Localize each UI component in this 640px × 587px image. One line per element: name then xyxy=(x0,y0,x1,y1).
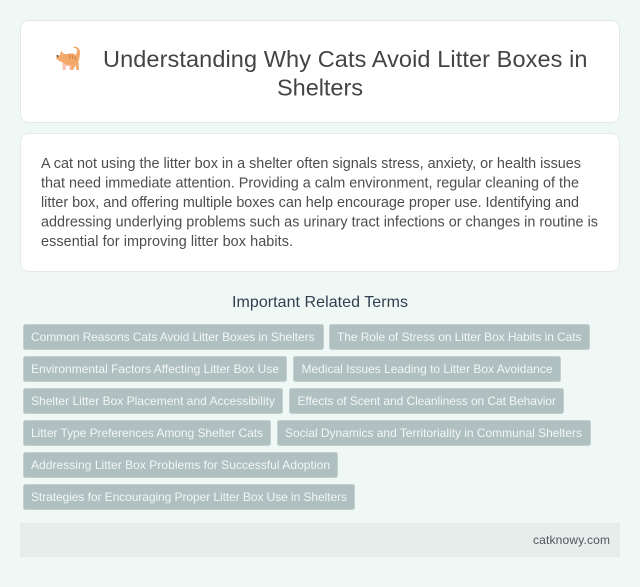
title xyxy=(103,46,588,100)
tag 3: Environmental Factors Affecting Litter Box Use xyxy=(31,362,279,376)
icon: cat xyxy=(56,46,80,70)
text block: description: litter box, and offering multiple boxes can help encourage proper use. Identifying and xyxy=(41,195,579,211)
text block: description: addressing underlying problems such as urinary tract infections or changes in routine is xyxy=(41,214,598,230)
tag 3 xyxy=(24,356,286,382)
tag 8: Social Dynamics and Territoriality in Communal Shelters xyxy=(285,426,582,440)
title: Understanding Why Cats Avoid Litter Boxes in xyxy=(103,46,588,72)
footer source text: catknowy.com xyxy=(533,533,610,547)
tag 4 xyxy=(294,356,560,382)
panel: description text card xyxy=(20,134,620,272)
tag 6 xyxy=(290,388,564,414)
tag 9 xyxy=(24,452,338,478)
tag 2: The Role of Stress on Litter Box Habits in Cats xyxy=(337,330,582,344)
tag 4: Medical Issues Leading to Litter Box Avoidance xyxy=(302,362,553,376)
tag 1 xyxy=(24,324,324,350)
tag 7 xyxy=(24,420,270,446)
text block: description: A cat not using the litter box in a shelter often signals stress, anxiety, or health issues xyxy=(41,156,581,172)
tag 2 xyxy=(330,324,590,350)
tag 1: Common Reasons Cats Avoid Litter Boxes in Shelters xyxy=(31,330,314,344)
tag 6: Effects of Scent and Cleanliness on Cat Behavior xyxy=(298,394,556,408)
heading: important related terms: Important Related Terms xyxy=(232,294,408,311)
text block: description: essential for improving litter box habits. xyxy=(41,234,293,250)
text block: description: that need immediate attention. Providing a calm environment, regular cleaning of the xyxy=(41,176,579,192)
tag 5: Shelter Litter Box Placement and Accessibility xyxy=(31,394,275,408)
text block: description xyxy=(41,156,598,250)
panel: title card xyxy=(20,20,620,122)
title: Shelters xyxy=(277,74,363,100)
tag 8 xyxy=(278,420,590,446)
footer xyxy=(20,523,620,557)
tag 10: Strategies for Encouraging Proper Litter Box Use in Shelters xyxy=(31,490,347,504)
tag 9: Addressing Litter Box Problems for Successful Adoption xyxy=(31,458,330,472)
tag 10 xyxy=(24,484,354,510)
tag 5 xyxy=(24,388,282,414)
tag list xyxy=(24,324,590,510)
tag 7: Litter Type Preferences Among Shelter Cats xyxy=(31,426,263,440)
